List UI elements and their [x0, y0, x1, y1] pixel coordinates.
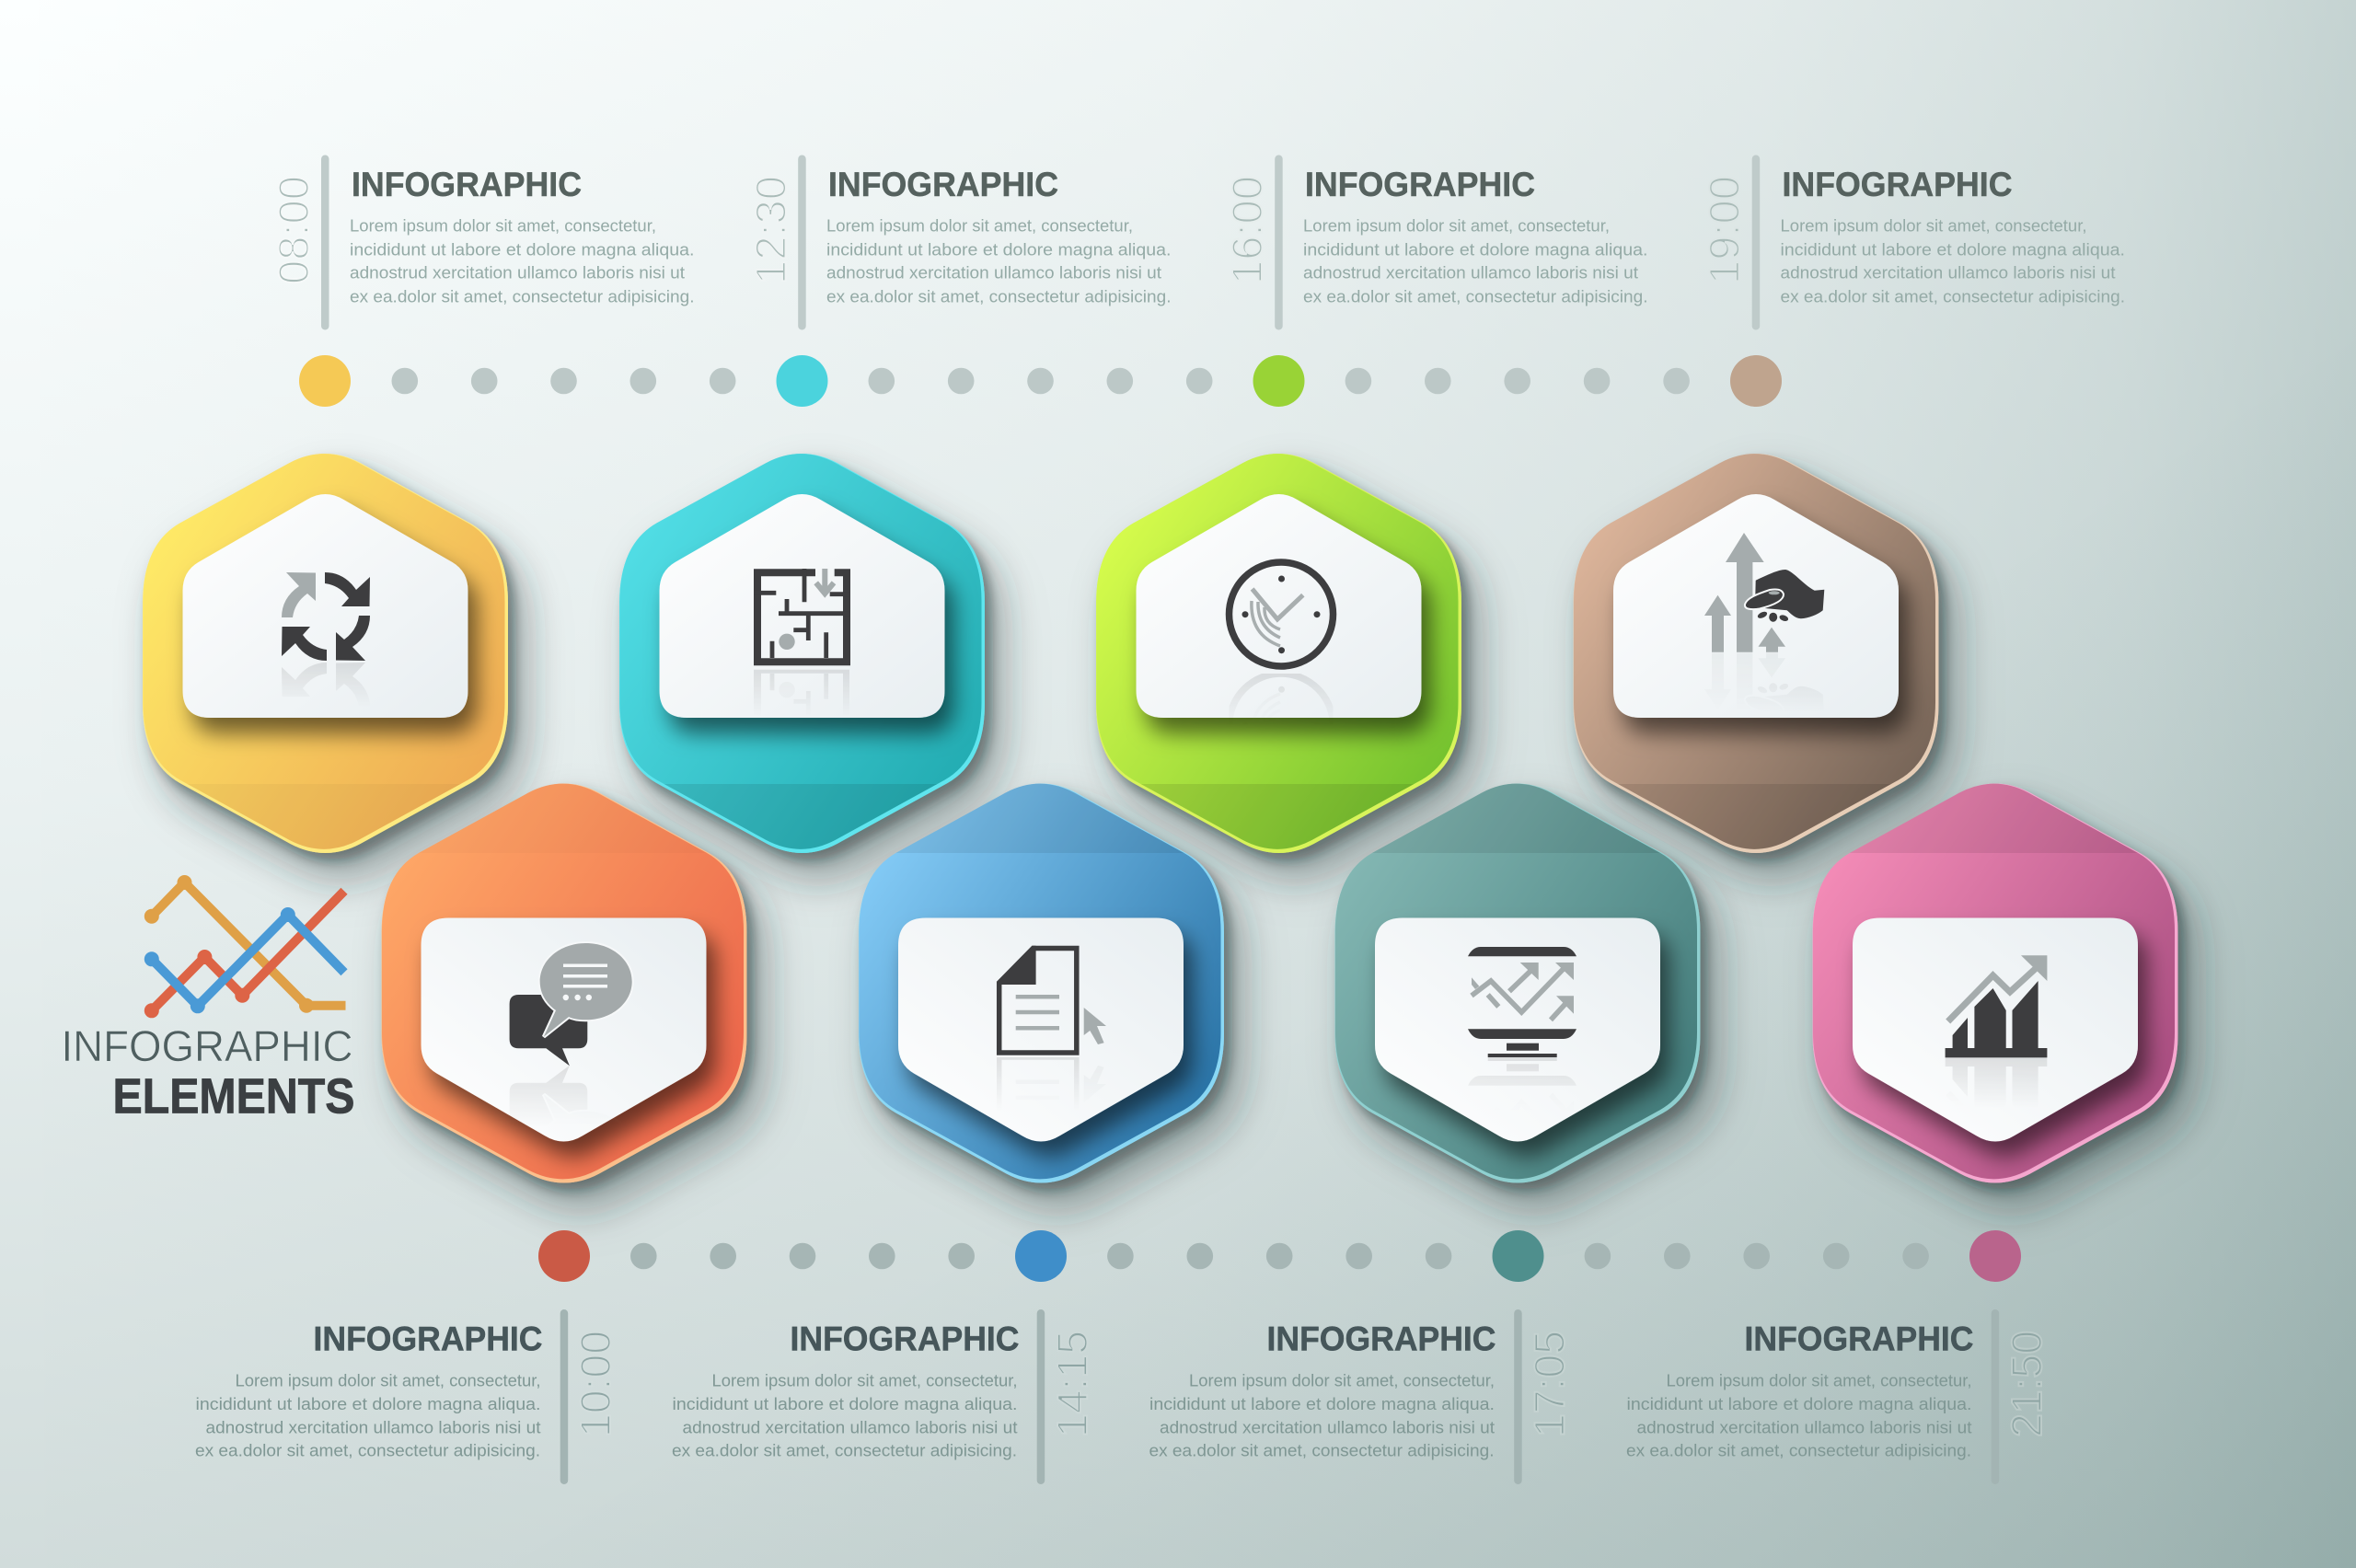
marker cyan: [777, 355, 828, 407]
white house panel: [1853, 918, 2138, 1141]
bottom text block 21:50: [1626, 1309, 2050, 1484]
icon: maze: [754, 569, 849, 662]
marker pink: [1969, 1230, 2021, 1282]
hexagon card: pink, bar chart: [1813, 784, 2177, 1183]
icon: rising arrows and hand: [1704, 533, 1824, 652]
body text: ex ea.dolor sit amet, consectetur adipisicing.: [1626, 1441, 1971, 1459]
logo word: infographic: INFOGRAPHIC: [61, 1021, 353, 1070]
body text: [672, 1371, 1018, 1459]
vertical bar: [1037, 1309, 1045, 1484]
body text: ex ea.dolor sit amet, consectetur adipisicing.: [1780, 287, 2125, 306]
logo word: elements: ELEMENTS: [112, 1069, 355, 1124]
time label 21:50: 21:50: [2003, 1331, 2050, 1437]
body text: Lorem ipsum dolor sit amet, consectetur,: [1666, 1371, 1971, 1389]
icon: chat bubbles: [510, 943, 632, 1066]
vertical bar: [560, 1309, 568, 1484]
body text: Lorem ipsum dolor sit amet, consectetur,: [236, 1371, 541, 1389]
time label 10:00: 10:00: [572, 1331, 619, 1437]
body text: Lorem ipsum dolor sit amet, consectetur,: [712, 1371, 1018, 1389]
body text: [350, 215, 694, 306]
heading: INFOGRAPHIC: [1305, 166, 1535, 203]
body text: incididunt ut labore et dolore magna aliqua.: [195, 1394, 541, 1413]
white house panel: [1613, 494, 1899, 718]
body text: adnostrud xercitation ullamco laboris nisi ut: [350, 263, 685, 282]
vertical bar: [1514, 1309, 1522, 1484]
marker brown: [1730, 355, 1782, 407]
body text: ex ea.dolor sit amet, consectetur adipisicing.: [195, 1441, 540, 1459]
body text: incididunt ut labore et dolore magna aliqua.: [826, 239, 1171, 259]
white house panel: [422, 918, 707, 1141]
heading: INFOGRAPHIC: [1782, 166, 2012, 203]
marker blue: [1015, 1230, 1067, 1282]
hexagon card: brown, rising arrows and hand: [1574, 454, 1938, 853]
body text: adnostrud xercitation ullamco laboris nisi ut: [1636, 1417, 1971, 1437]
body text: adnostrud xercitation ullamco laboris nisi ut: [683, 1417, 1018, 1437]
body text: adnostrud xercitation ullamco laboris nisi ut: [1160, 1417, 1495, 1437]
body text: Lorem ipsum dolor sit amet, consectetur,: [1303, 215, 1610, 236]
hexagon card: orange, chat: [381, 784, 747, 1188]
vertical bar: [321, 155, 329, 329]
marker teal: [1493, 1230, 1544, 1282]
body text: incididunt ut labore et dolore magna aliqua.: [1780, 239, 2125, 259]
heading: INFOGRAPHIC: [313, 1320, 543, 1358]
bottom text block 17:05: [1149, 1309, 1574, 1484]
heading: INFOGRAPHIC: [1266, 1320, 1496, 1358]
body text: Lorem ipsum dolor sit amet, consectetur,: [1780, 215, 2087, 236]
heading: INFOGRAPHIC: [790, 1320, 1020, 1358]
time label 14:15: 14:15: [1048, 1331, 1096, 1437]
body text: adnostrud xercitation ullamco laboris nisi ut: [1780, 263, 2115, 282]
icon: clock: [1230, 562, 1333, 666]
body text: [826, 215, 1171, 306]
time label 16:00: 16:00: [1223, 176, 1271, 284]
body text: [1780, 215, 2125, 306]
icon: document and cursor: [997, 946, 1106, 1053]
white house panel: [898, 918, 1184, 1141]
body text: incididunt ut labore et dolore magna aliqua.: [672, 1394, 1018, 1413]
vertical bar: [798, 155, 806, 329]
logo: infographic elements: [61, 875, 355, 1124]
white house panel: [182, 494, 468, 718]
body text: incididunt ut labore et dolore magna aliqua.: [1149, 1394, 1495, 1413]
body text: ex ea.dolor sit amet, consectetur adipisicing.: [826, 287, 1171, 306]
body text: incididunt ut labore et dolore magna aliqua.: [1627, 1394, 1971, 1413]
white house panel: [1136, 494, 1421, 718]
time label 12:30: 12:30: [747, 176, 795, 284]
vertical bar: [1752, 155, 1760, 329]
body text: [1303, 215, 1647, 306]
bottom dotted timeline: [538, 1230, 2021, 1282]
hexagon card: blue, document: [859, 784, 1224, 1183]
body text: ex ea.dolor sit amet, consectetur adipisicing.: [350, 287, 694, 306]
icon: bar chart with arrow: [1946, 955, 2047, 1057]
body text: ex ea.dolor sit amet, consectetur adipisicing.: [672, 1441, 1017, 1459]
top text block 16:00: [1223, 155, 1647, 329]
hexagon card: green, clock: [1096, 454, 1461, 853]
heading: INFOGRAPHIC: [1745, 1320, 1973, 1358]
bottom text block 14:15: [672, 1309, 1096, 1484]
body text: [1626, 1371, 1971, 1459]
hexagon card: cyan, maze: [619, 454, 985, 853]
marker green: [1253, 355, 1305, 407]
body text: adnostrud xercitation ullamco laboris nisi ut: [1303, 263, 1638, 282]
white house panel: [659, 494, 944, 718]
body text: [195, 1371, 541, 1459]
body text: incididunt ut labore et dolore magna aliqua.: [350, 239, 694, 259]
body text: adnostrud xercitation ullamco laboris nisi ut: [206, 1417, 541, 1437]
hexagon card: yellow, recycle arrows: [143, 454, 508, 853]
body text: [1149, 1371, 1495, 1459]
body text: adnostrud xercitation ullamco laboris nisi ut: [826, 263, 1161, 282]
bottom text block 10:00: [195, 1309, 619, 1484]
body text: Lorem ipsum dolor sit amet, consectetur,: [350, 215, 656, 236]
top dotted timeline: [299, 355, 1782, 407]
body text: ex ea.dolor sit amet, consectetur adipisicing.: [1149, 1441, 1495, 1459]
top text block 12:30: [747, 155, 1171, 329]
top text block 08:00: [270, 155, 694, 329]
vertical bar: [1275, 155, 1283, 329]
time label 19:00: 19:00: [1701, 176, 1749, 284]
vertical bar: [1992, 1309, 1999, 1484]
body text: Lorem ipsum dolor sit amet, consectetur,: [826, 215, 1133, 236]
body text: ex ea.dolor sit amet, consectetur adipisicing.: [1303, 287, 1647, 306]
marker yellow: [299, 355, 351, 407]
body text: incididunt ut labore et dolore magna aliqua.: [1303, 239, 1647, 259]
time label 08:00: 08:00: [270, 176, 318, 284]
top text block 19:00: [1701, 155, 2125, 329]
body text: Lorem ipsum dolor sit amet, consectetur,: [1189, 1371, 1495, 1389]
icon: monitor with chart: [1468, 947, 1576, 1057]
heading: INFOGRAPHIC: [352, 166, 582, 203]
hexagon card: teal, monitor: [1334, 784, 1701, 1183]
time label 17:05: 17:05: [1526, 1331, 1574, 1437]
white house panel: [1375, 918, 1660, 1141]
line chart logo: [144, 875, 346, 1018]
icon: recycle arrows: [282, 572, 370, 661]
marker red: [538, 1230, 590, 1282]
heading: INFOGRAPHIC: [828, 166, 1058, 203]
